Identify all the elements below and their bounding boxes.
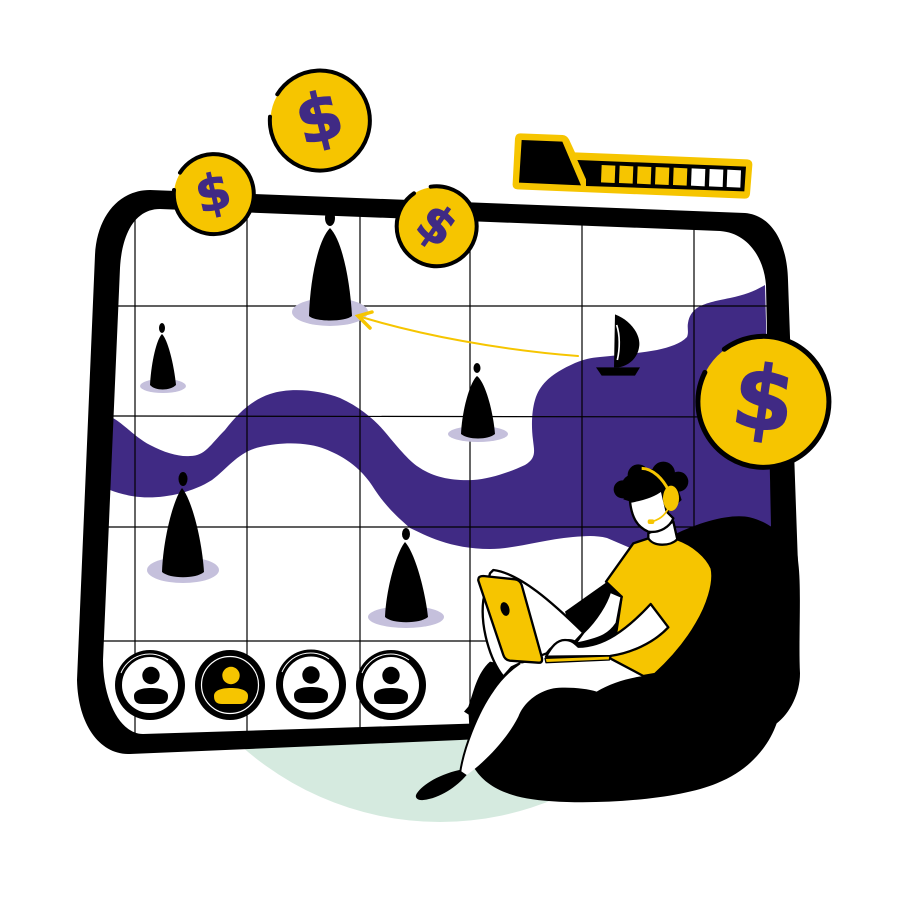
piece 4 — [147, 472, 219, 583]
yellow shirt — [606, 538, 712, 676]
avatar 3 — [276, 650, 346, 720]
piece 1 — [292, 210, 368, 326]
back leg — [483, 570, 583, 677]
avatar 1 — [115, 650, 185, 720]
headset — [642, 468, 679, 524]
player avatars — [115, 650, 426, 720]
avatar 4 — [356, 650, 426, 720]
grid lines — [100, 215, 772, 737]
person on beanbag — [416, 462, 800, 802]
shoe — [416, 770, 467, 800]
progress bar — [513, 133, 752, 199]
green background circle — [220, 725, 660, 822]
coin top: $ — [288, 75, 351, 161]
piece 5 — [368, 528, 444, 628]
coin right — [698, 336, 829, 467]
coin right: $ — [726, 343, 801, 454]
coin mid — [396, 186, 477, 266]
piece 3 — [448, 363, 508, 442]
laptop screen — [478, 576, 542, 663]
coin left: $ — [190, 161, 237, 225]
hair — [614, 462, 688, 513]
inner arm — [575, 592, 622, 644]
neck — [648, 522, 677, 545]
yellow arrow — [358, 312, 578, 356]
coin mid: $ — [406, 192, 468, 259]
laptop camera — [499, 601, 511, 617]
beanbag — [473, 516, 800, 802]
coin left — [174, 154, 254, 234]
tablet frame — [77, 190, 798, 754]
front arm — [546, 604, 668, 657]
purple river — [110, 285, 772, 552]
front leg — [460, 658, 643, 775]
avatar 2 — [195, 650, 265, 720]
coin top — [270, 71, 370, 171]
piece 2 — [140, 323, 186, 393]
back leg shadow — [464, 662, 517, 727]
torso shadow behind arm — [565, 583, 622, 643]
laptop keyboard — [545, 656, 610, 663]
face — [630, 490, 673, 532]
map pieces — [140, 210, 508, 628]
sailboat — [596, 314, 640, 376]
tablet screen — [100, 205, 774, 737]
